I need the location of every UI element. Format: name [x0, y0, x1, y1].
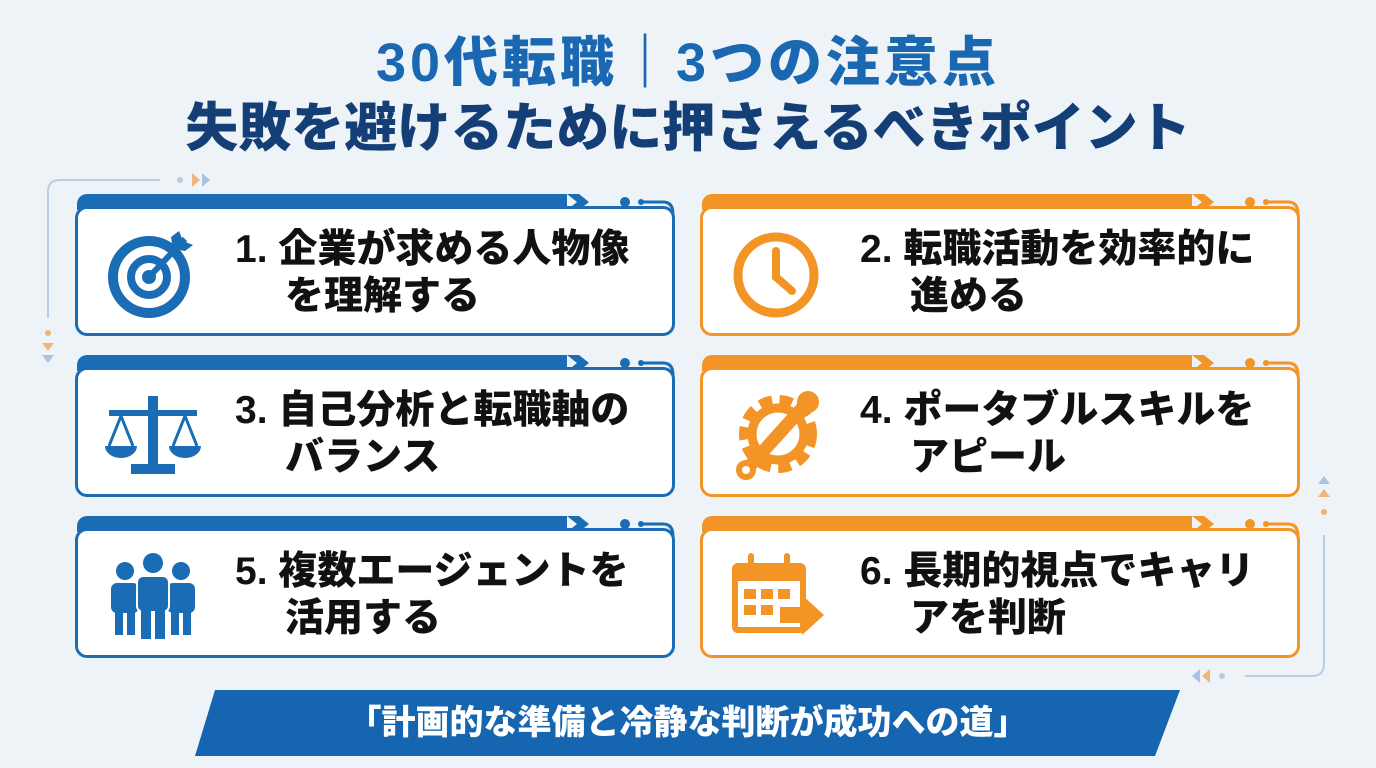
text 1 — [235, 227, 629, 318]
text 5 — [235, 550, 629, 640]
text 3 — [235, 389, 629, 479]
title line 1: 30代転職｜3つの注意点 — [376, 33, 1000, 93]
card 4 — [700, 355, 1300, 497]
banner text: 「計画的な準備と冷静な判断が成功への道」 — [348, 704, 1028, 742]
title — [185, 33, 1191, 158]
text 5: 活用する — [285, 597, 441, 640]
text 5: 5. 複数エージェントを — [235, 550, 629, 593]
text 4: アピール — [910, 436, 1066, 479]
card 2 — [700, 194, 1300, 336]
icon: target — [108, 231, 193, 318]
card 1 — [75, 194, 675, 336]
text 3: 3. 自己分析と転職軸の — [235, 389, 629, 432]
text 1: 1. 企業が求める人物像 — [235, 228, 629, 271]
text 6: アを判断 — [910, 597, 1066, 640]
card 3 — [75, 355, 675, 497]
text 4 — [860, 388, 1254, 479]
icon: calendar — [732, 553, 824, 635]
text 2: 進める — [910, 275, 1027, 318]
text 4: 4. ポータブルスキルを — [860, 389, 1254, 432]
text 6: 6. 長期的視点でキャリ — [860, 550, 1254, 593]
card 5 — [75, 516, 675, 658]
text 2: 2. 転職活動を効率的に — [860, 228, 1254, 271]
card 6 — [700, 516, 1300, 658]
icon: people — [111, 553, 195, 639]
icon: scale — [105, 396, 201, 474]
icon: clock — [734, 232, 818, 318]
bottom banner — [195, 690, 1180, 756]
text 3: バランス — [285, 436, 440, 479]
text 1: を理解する — [285, 275, 480, 318]
text 6 — [860, 550, 1254, 640]
text 2 — [860, 228, 1254, 318]
title line 2: 失敗を避けるために押さえるべきポイント — [185, 99, 1191, 158]
icon: gear and wrench — [736, 391, 819, 480]
